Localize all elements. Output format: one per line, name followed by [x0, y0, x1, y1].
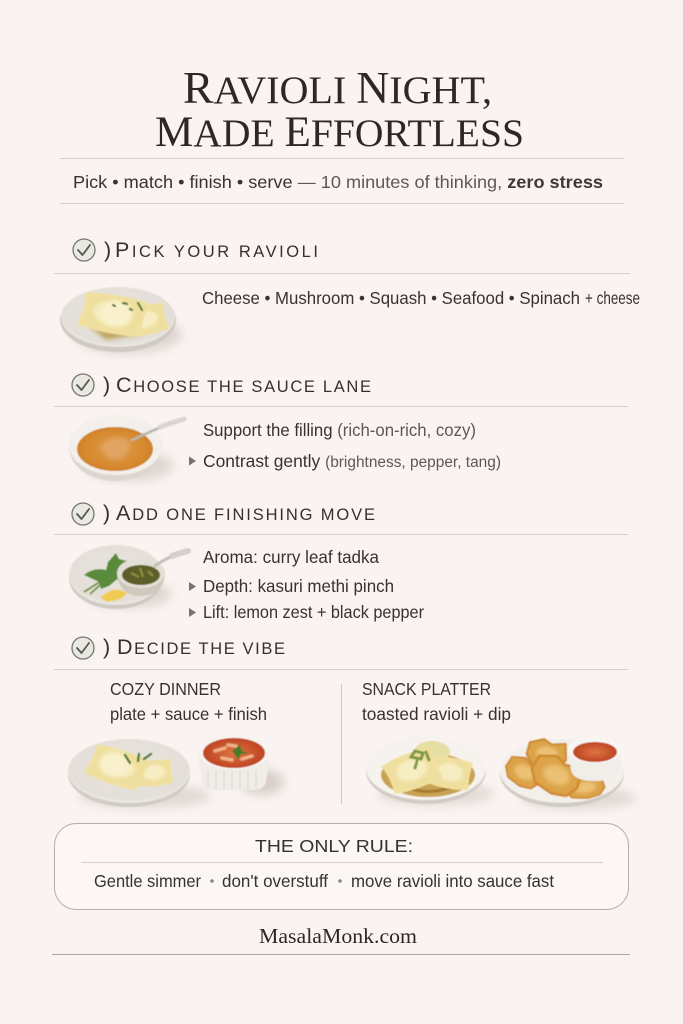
icon: sauce bowl	[69, 415, 184, 481]
title: MADE EFFORTLESS	[155, 109, 524, 156]
ravioli types: Cheese • Mushroom • Squash • Seafood • Spinach	[202, 288, 580, 308]
section 1: pick your ravioli	[54, 238, 640, 354]
heading: choose the sauce lane: CHOOSE THE SAUCE LANE	[116, 373, 371, 397]
rule heading: THE ONLY RULE:	[255, 836, 413, 856]
finishing options: Aroma: curry leaf tadka	[203, 547, 379, 567]
sauce options: Contrast gently (brightness, pepper, tang)	[203, 451, 501, 471]
heading: pick your ravioli: PICK YOUR RAVIOLI	[115, 238, 318, 262]
section 3: add one finishing move	[54, 501, 628, 622]
finishing options	[189, 547, 424, 622]
rule text: don't overstuff	[222, 871, 328, 891]
option: cozy dinner	[68, 679, 284, 808]
icon: ravioli plate	[60, 287, 182, 354]
rule text: move ravioli into sauce fast	[351, 871, 554, 891]
heading: add one finishing move: ADD ONE FINISHING MOVE	[116, 501, 375, 525]
option: snack platter: SNACK PLATTER	[362, 679, 491, 699]
heading: add one finishing move: )	[103, 501, 110, 525]
rule text	[94, 871, 554, 891]
option: snack platter: toasted ravioli + dip	[362, 704, 511, 724]
panel: the only rule	[54, 824, 628, 910]
icon: finishing plate	[69, 545, 188, 609]
icon: ravioli plate with sauce ramekin	[68, 734, 284, 808]
option: cozy dinner: plate + sauce + finish	[110, 704, 267, 724]
icon: ravioli in broth plate	[366, 736, 494, 805]
heading: choose the sauce lane: )	[103, 373, 110, 397]
icon: toasted ravioli with dip	[500, 737, 636, 809]
option: cozy dinner: COZY DINNER	[110, 679, 221, 699]
section 2: choose the sauce lane	[54, 373, 628, 481]
subtitle: Pick • match • finish • serve — 10 minutes of thinking, zero stress	[73, 172, 603, 192]
option: snack platter	[362, 679, 636, 809]
ravioli types: + cheese	[585, 288, 640, 308]
rule text: Gentle simmer	[94, 871, 201, 891]
sauce options: Support the filling (rich-on-rich, cozy)	[203, 420, 476, 440]
heading: decide the vibe: DECIDE THE VIBE	[117, 635, 285, 659]
finishing options: Lift: lemon zest + black pepper	[203, 602, 424, 622]
finishing options: Depth: kasuri methi pinch	[203, 576, 394, 596]
title: RAVIOLI NIGHT,	[183, 63, 492, 113]
title	[155, 63, 524, 156]
footer: website: MasalaMonk.com	[259, 924, 417, 948]
section 4: decide the vibe	[54, 635, 636, 809]
heading: pick your ravioli: )	[104, 238, 111, 262]
sauce options	[189, 420, 501, 471]
heading: decide the vibe: )	[103, 635, 110, 659]
